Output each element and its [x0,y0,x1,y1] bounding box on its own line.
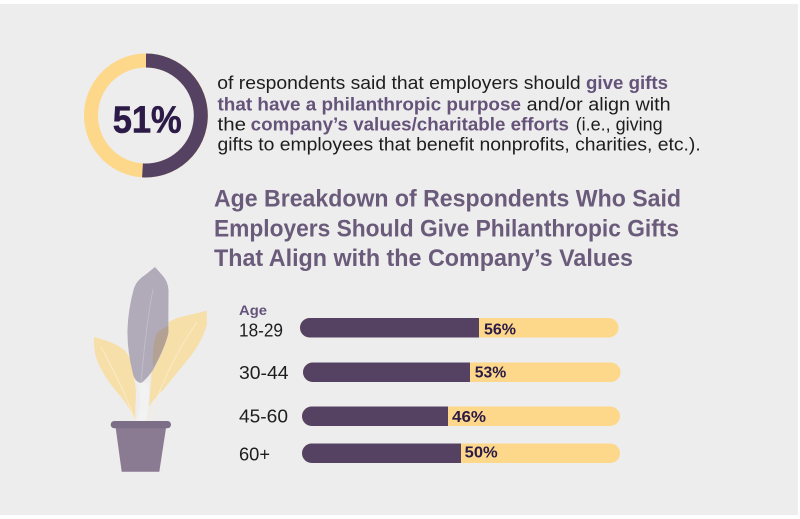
bar row: 60+: 50% [465,445,498,462]
bar row: 18-29 [239,318,618,341]
bar row: 60+ [239,444,620,465]
bar row: 30-44: 53% [475,364,506,381]
intro text block: give gifts [586,72,668,93]
heading: Employers Should Give Philanthropic Gifts [214,216,679,243]
intro text block [217,72,701,155]
intro text block: company’s values/charitable efforts [251,114,569,135]
donut chart: 51%: 51% [113,100,182,142]
intro text block: gifts to employees that benefit nonprofits, charities, etc.). [218,134,701,155]
bar row: 30-44 [239,362,620,383]
intro text block: (i.e., giving [576,114,663,135]
heading: That Align with the Company’s Values [214,245,633,272]
intro text block: of respondents said that employers should [217,72,581,93]
icon: potted plant [94,267,207,472]
bar row: 45-60 [239,406,620,427]
bar row: 45-60: 45-60 [239,407,288,427]
heading: Age Breakdown of Respondents Who Said [214,186,681,213]
heading [214,186,681,272]
bar row: 45-60: 46% [452,409,486,426]
donut chart: 51% [91,60,201,170]
axis title: Age: Age [239,303,268,318]
intro text block: and/or align with [527,94,671,115]
bar chart: age breakdown [239,303,620,465]
bar row: 60+: 60+ [239,445,270,465]
bar row: 18-29: 18-29 [239,321,283,341]
intro text block: the [218,114,246,135]
bar row: 30-44: 30-44 [239,363,288,383]
intro text block: that have a philanthropic purpose [218,94,521,115]
bar row: 18-29: 56% [484,321,516,338]
